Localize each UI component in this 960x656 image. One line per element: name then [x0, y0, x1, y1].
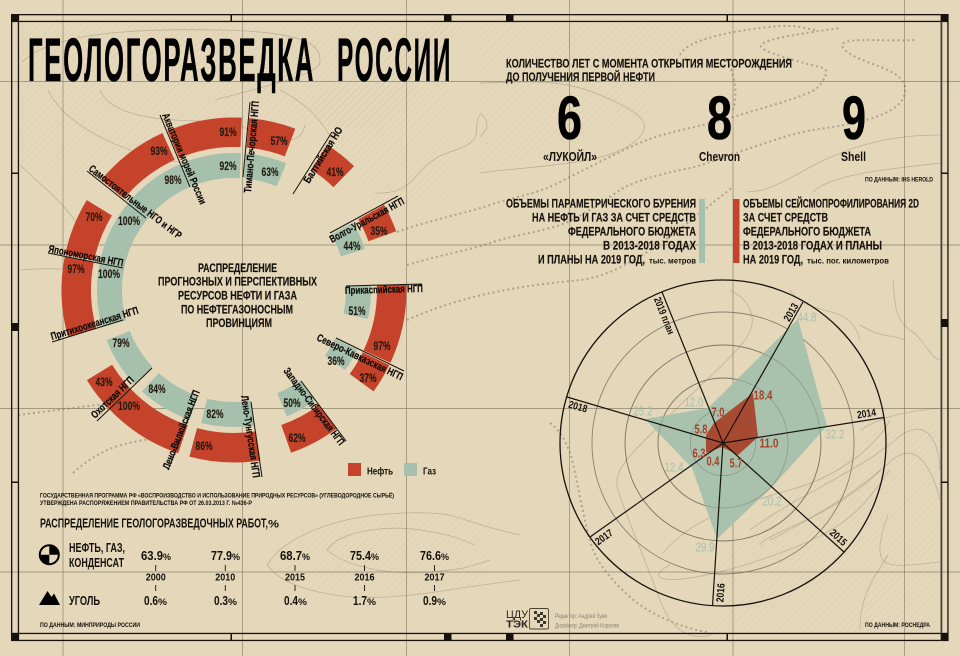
seismic polygon: [706, 393, 758, 455]
heading: years to first oil: КОЛИЧЕСТВО ЛЕТ С МОМЕНТА ОТКРЫТИЯ МЕСТОРОЖДЕНИЯ: [506, 58, 792, 70]
drilling values: [634, 310, 845, 554]
credits: Дизайнер: Дмитрий Королев: [555, 622, 619, 630]
percentage values: 44%: [344, 239, 361, 253]
year axis: 2017: [424, 572, 445, 584]
province labels: Япономорская НГП: [47, 243, 124, 269]
table heading: РАСПРЕДЕЛЕНИЕ ГЕОЛОГОРАЗВЕДОЧНЫХ РАБОТ,: [40, 516, 268, 530]
coal values: 0.4: [284, 593, 299, 608]
oil gas condensate label: НЕФТЬ, ГАЗ,: [69, 541, 125, 555]
year axis: 2016: [354, 572, 375, 584]
percentage values: 100%: [118, 214, 140, 228]
drilling volumes text: В 2013-2018 ГОДАХ: [603, 241, 696, 253]
coal values: 0.6: [144, 593, 158, 608]
stat: Shell: [841, 84, 866, 164]
percentage values: 51%: [348, 304, 366, 318]
drilling volumes text: И ПЛАНЫ НА 2019 ГОД,: [538, 254, 645, 266]
seismic volumes text: В 2013-2018 ГОДАХ И ПЛАНЫ: [743, 241, 882, 253]
province labels: Самостоятельные НГО и НГР: [86, 163, 184, 242]
drilling volumes text: ОБЪЕМЫ ПАРАМЕТРИЧЕСКОГО БУРЕНИЯ: [506, 199, 696, 211]
source: Rosnedra: ПО ДАННЫМ: РОСНЕДРА: [865, 622, 930, 629]
heading: years to first oil: ДО ПОЛУЧЕНИЯ ПЕРВОЙ НЕФТИ: [506, 71, 655, 84]
grid rings: [592, 312, 854, 574]
percentage values: 100%: [118, 399, 140, 413]
percentage values: 70%: [86, 210, 103, 224]
province separators: [48, 102, 422, 477]
oil values: 77.9: [211, 548, 232, 563]
oil values: %: [302, 552, 310, 562]
percentage values: 35%: [370, 224, 388, 238]
drilling values: 20.2: [762, 494, 782, 508]
year axis: 2000: [146, 572, 166, 584]
chart caption: ПРОГНОЗНЫХ И ПЕРСПЕКТИВНЫХ: [158, 276, 317, 288]
spoke year labels: 2014: [856, 407, 877, 421]
oil gas condensate label: КОНДЕНСАТ: [69, 556, 124, 570]
programme note: УТВЕРЖДЕНА РАСПОРЯЖЕНИЕМ ПРАВИТЕЛЬСТВА РФ ОТ 26.03.2013 Г. №436-Р: [40, 500, 252, 507]
oil values: 63.9: [141, 548, 163, 563]
coal values: %: [367, 597, 376, 607]
logo: CDU TEK: [506, 608, 548, 630]
year axis: 2015: [285, 572, 305, 584]
percentage values: 37%: [360, 371, 377, 385]
logo: CDU TEK: ЦДУ: [506, 609, 529, 621]
percentage values: [68, 125, 391, 453]
credits: [555, 612, 619, 630]
oil values: %: [163, 552, 171, 562]
spoke year labels: [567, 296, 877, 603]
oil values: %: [371, 552, 379, 562]
coal values: %: [158, 597, 167, 607]
stat: Lukoil: [543, 84, 597, 164]
seismic volumes text: НА 2019 ГОД,: [743, 254, 803, 266]
programme note: [40, 491, 394, 507]
programme note: ГОСУДАРСТВЕННАЯ ПРОГРАММА РФ «ВОСПРОИЗВОДСТВО И ИСПОЛЬЗОВАНИЕ ПРИРОДНЫХ РЕСУРСОВ» (УГЛЕВОДОРОДНОЕ СЫРЬЁ): [40, 491, 394, 499]
percentage values: 100%: [98, 267, 120, 281]
drilling values: 32.2: [826, 428, 845, 442]
percentage values: 84%: [148, 382, 166, 396]
drilling values: 12.4: [664, 460, 684, 474]
seismic values: 7.0: [712, 406, 725, 420]
seismic values: 5.7: [730, 456, 743, 470]
legend: Нефть: [367, 466, 393, 478]
seismic values: [692, 388, 779, 470]
spoke year labels: 2015: [827, 527, 849, 549]
drilling values: 25.2: [634, 404, 653, 418]
province labels: Акватории морей России: [159, 111, 209, 206]
percentage values: 86%: [196, 439, 213, 453]
source: ministry: ПО ДАННЫМ: МИНПРИРОДЫ РОССИИ: [40, 622, 140, 629]
province labels: Прикаспийская НГП: [345, 283, 423, 297]
province labels: Волго-Уральская НГП: [328, 195, 406, 246]
percentage values: 63%: [262, 165, 279, 179]
oil gas condensate label: [69, 541, 125, 570]
seismic colour bar: [733, 199, 740, 263]
outer circle: [560, 280, 886, 606]
spoke year labels: 2016: [714, 583, 728, 603]
stat: Chevron: Chevron: [699, 150, 740, 164]
percentage values: 57%: [270, 134, 288, 148]
stat: Lukoil: 6: [557, 84, 582, 152]
spokes: [567, 292, 884, 606]
coal values: 0.3: [214, 593, 228, 608]
coal values: [144, 593, 446, 608]
province labels: Западно-Сибирская НГП: [281, 366, 347, 448]
percentage values: 97%: [374, 339, 391, 353]
gas arcs: [58, 114, 410, 466]
percentage values: 43%: [96, 375, 113, 389]
percentage values: 62%: [288, 431, 306, 445]
seismic values: 6.3: [692, 446, 706, 460]
spoke year labels: 2019 план: [651, 296, 677, 336]
radial chart: oil and gas resources by province: [11, 67, 457, 513]
province labels: Лено-Тунгусская НГП: [238, 395, 262, 479]
stat: Lukoil: «ЛУКОЙЛ»: [543, 149, 597, 164]
stat: Shell: 9: [842, 84, 866, 152]
drilling values: 44.8: [798, 310, 817, 324]
table heading: %: [268, 518, 279, 530]
province labels: Балтийская НО: [301, 125, 345, 186]
drilling values: 29.9: [696, 540, 715, 554]
oil values: %: [441, 552, 449, 562]
spoke year labels: 2013: [781, 301, 801, 324]
drilling volumes text: НА НЕФТЬ И ГАЗ ЗА СЧЕТ СРЕДСТВ: [532, 213, 696, 225]
logo: CDU TEK: ТЭК: [506, 618, 529, 630]
credits: Редактор: Андрей Зуев: [555, 612, 607, 620]
drilling volumes text: ФЕДЕРАЛЬНОГО БЮДЖЕТА: [568, 227, 696, 239]
percentage values: 79%: [112, 336, 130, 350]
seismic values: 5.8: [694, 422, 708, 436]
title: ГЕОЛОГОРАЗВЕДКА: [28, 26, 315, 94]
seismic values: 11.0: [760, 436, 779, 450]
coal values: 0.9: [423, 593, 437, 608]
stat: Chevron: [699, 84, 740, 164]
text: РОССИИ: [337, 26, 452, 94]
legend: Газ: [423, 466, 436, 478]
drilling polygon: [645, 319, 827, 539]
seismic volumes text: тыс. пог. километров: [807, 255, 889, 265]
spoke year labels: 2018: [567, 399, 589, 416]
icon: oil well symbol: [40, 545, 59, 564]
seismic volumes text: ЗА СЧЕТ СРЕДСТВ: [743, 213, 828, 225]
coal values: %: [228, 597, 237, 607]
chart caption: ПО НЕФТЕГАЗОНОСНЫМ: [181, 304, 293, 316]
percentage values: 41%: [326, 165, 344, 179]
percentage values: 93%: [150, 144, 168, 158]
table: distribution of exploration work: [39, 516, 449, 608]
percentage values: 92%: [220, 159, 237, 173]
coal values: %: [298, 597, 307, 607]
coal values: 1.7: [353, 593, 367, 608]
oil values: 68.7: [280, 548, 302, 563]
spoke year labels: 2017: [593, 527, 616, 548]
coal label: УГОЛЬ: [69, 594, 100, 608]
province labels: Тимано-Печорская НГП: [242, 101, 262, 193]
percentage values: 36%: [328, 354, 345, 368]
seismic volumes text: [743, 198, 919, 266]
chart caption: РЕСУРСОВ НЕФТИ И ГАЗА: [178, 290, 297, 302]
oil values: %: [232, 552, 240, 562]
province labels: Лено-Вилюйская НГП: [161, 389, 203, 471]
province labels: Охотская НГП: [89, 374, 137, 421]
coal values: %: [437, 597, 446, 607]
stat: Shell: Shell: [841, 150, 866, 164]
province labels: [47, 101, 423, 479]
seismic values: 0.4: [706, 454, 720, 468]
chart caption: [158, 263, 317, 330]
legend: [348, 463, 436, 478]
stat: Chevron: 8: [707, 84, 732, 152]
year axis: [146, 565, 445, 591]
percentage values: 97%: [68, 262, 85, 276]
chart caption: ПРОВИНЦИЯМ: [206, 318, 272, 330]
oil values: [141, 548, 449, 563]
oil values: 75.4: [350, 548, 372, 563]
heading: years to first oil: [506, 58, 792, 84]
chart caption: РАСПРЕДЕЛЕНИЕ: [198, 263, 277, 275]
seismic volumes text: ФЕДЕРАЛЬНОГО БЮДЖЕТА: [743, 227, 871, 239]
oil arcs: [11, 67, 457, 513]
percentage values: 91%: [220, 125, 237, 139]
drilling volumes text: тыс. метров: [649, 255, 696, 265]
percentage values: 50%: [284, 396, 301, 410]
drilling colour bar: [699, 199, 705, 263]
year axis: 2010: [215, 572, 235, 584]
source: IHS Herold: ПО ДАННЫМ: IHS HEROLD: [865, 177, 933, 184]
radar chart: [560, 280, 886, 606]
grid rings over fill: [625, 345, 821, 541]
title: [28, 26, 452, 94]
percentage values: 82%: [206, 407, 224, 421]
oil values: 76.6: [420, 548, 441, 563]
drilling values: 12.0: [684, 396, 704, 410]
percentage values: 98%: [164, 173, 182, 187]
seismic values: 18.4: [754, 388, 773, 402]
province labels: Северо-Кавказская НГП: [315, 332, 405, 383]
province labels: Притихоокеанская НГП: [49, 305, 140, 343]
drilling volumes text: [506, 199, 696, 266]
icon: coal mountains: [39, 591, 60, 605]
